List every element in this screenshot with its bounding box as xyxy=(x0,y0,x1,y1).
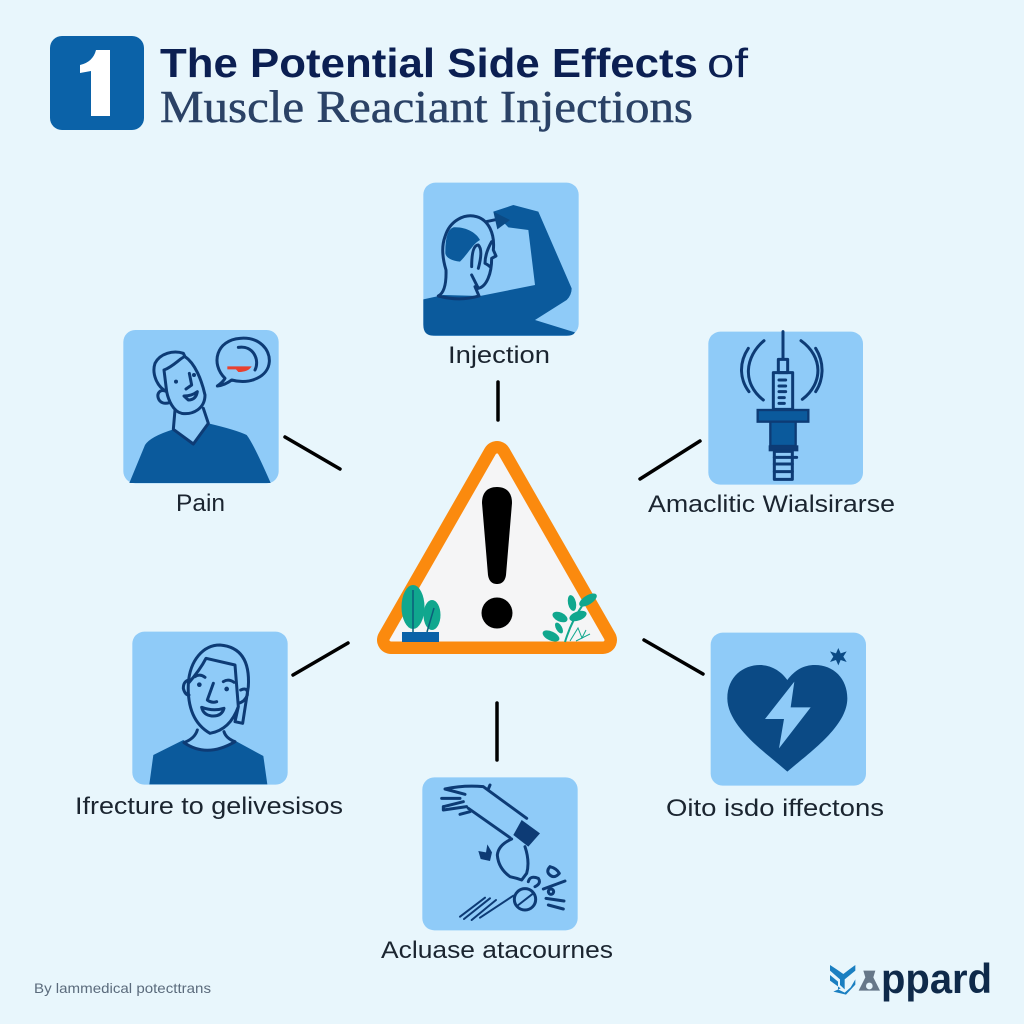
connector: injection xyxy=(496,382,500,420)
panel: heart: Oito isdo iffectons xyxy=(666,795,884,822)
panel: bottom hand xyxy=(381,777,613,964)
panel: injection: Injection xyxy=(448,342,550,369)
connector: pain xyxy=(285,437,340,469)
panel: anaphylactic xyxy=(648,332,895,518)
title: The Potential Side Effects xyxy=(160,40,698,86)
panel: heart xyxy=(666,633,884,822)
source note: By lammedical potecttrans xyxy=(34,980,211,996)
logo xyxy=(830,955,992,1002)
number badge xyxy=(50,36,144,130)
panel: fracture person xyxy=(75,632,343,820)
panel: fracture person: Ifrecture to gelivesisos xyxy=(75,793,343,820)
exclamation mark xyxy=(482,487,512,628)
connector: infection left xyxy=(293,643,348,675)
panel: anaphylactic: Amaclitic Wialsirarse xyxy=(648,491,895,518)
warning triangle xyxy=(391,455,603,644)
plant: left pot xyxy=(402,585,440,642)
logo: ppard xyxy=(881,955,992,1002)
title: of xyxy=(707,40,749,86)
connector: heart xyxy=(644,640,703,674)
panel: pain: Pain xyxy=(176,490,225,517)
title xyxy=(160,40,749,132)
plant: right sprig xyxy=(541,591,599,644)
panel: injection xyxy=(423,183,579,369)
title: Muscle Reaciant Injections xyxy=(160,81,693,132)
connector: bottom xyxy=(495,703,499,760)
connector: anaphylactic xyxy=(640,441,700,479)
panel: pain xyxy=(123,330,279,517)
panel: bottom hand: Acluase atacournes xyxy=(381,937,613,964)
